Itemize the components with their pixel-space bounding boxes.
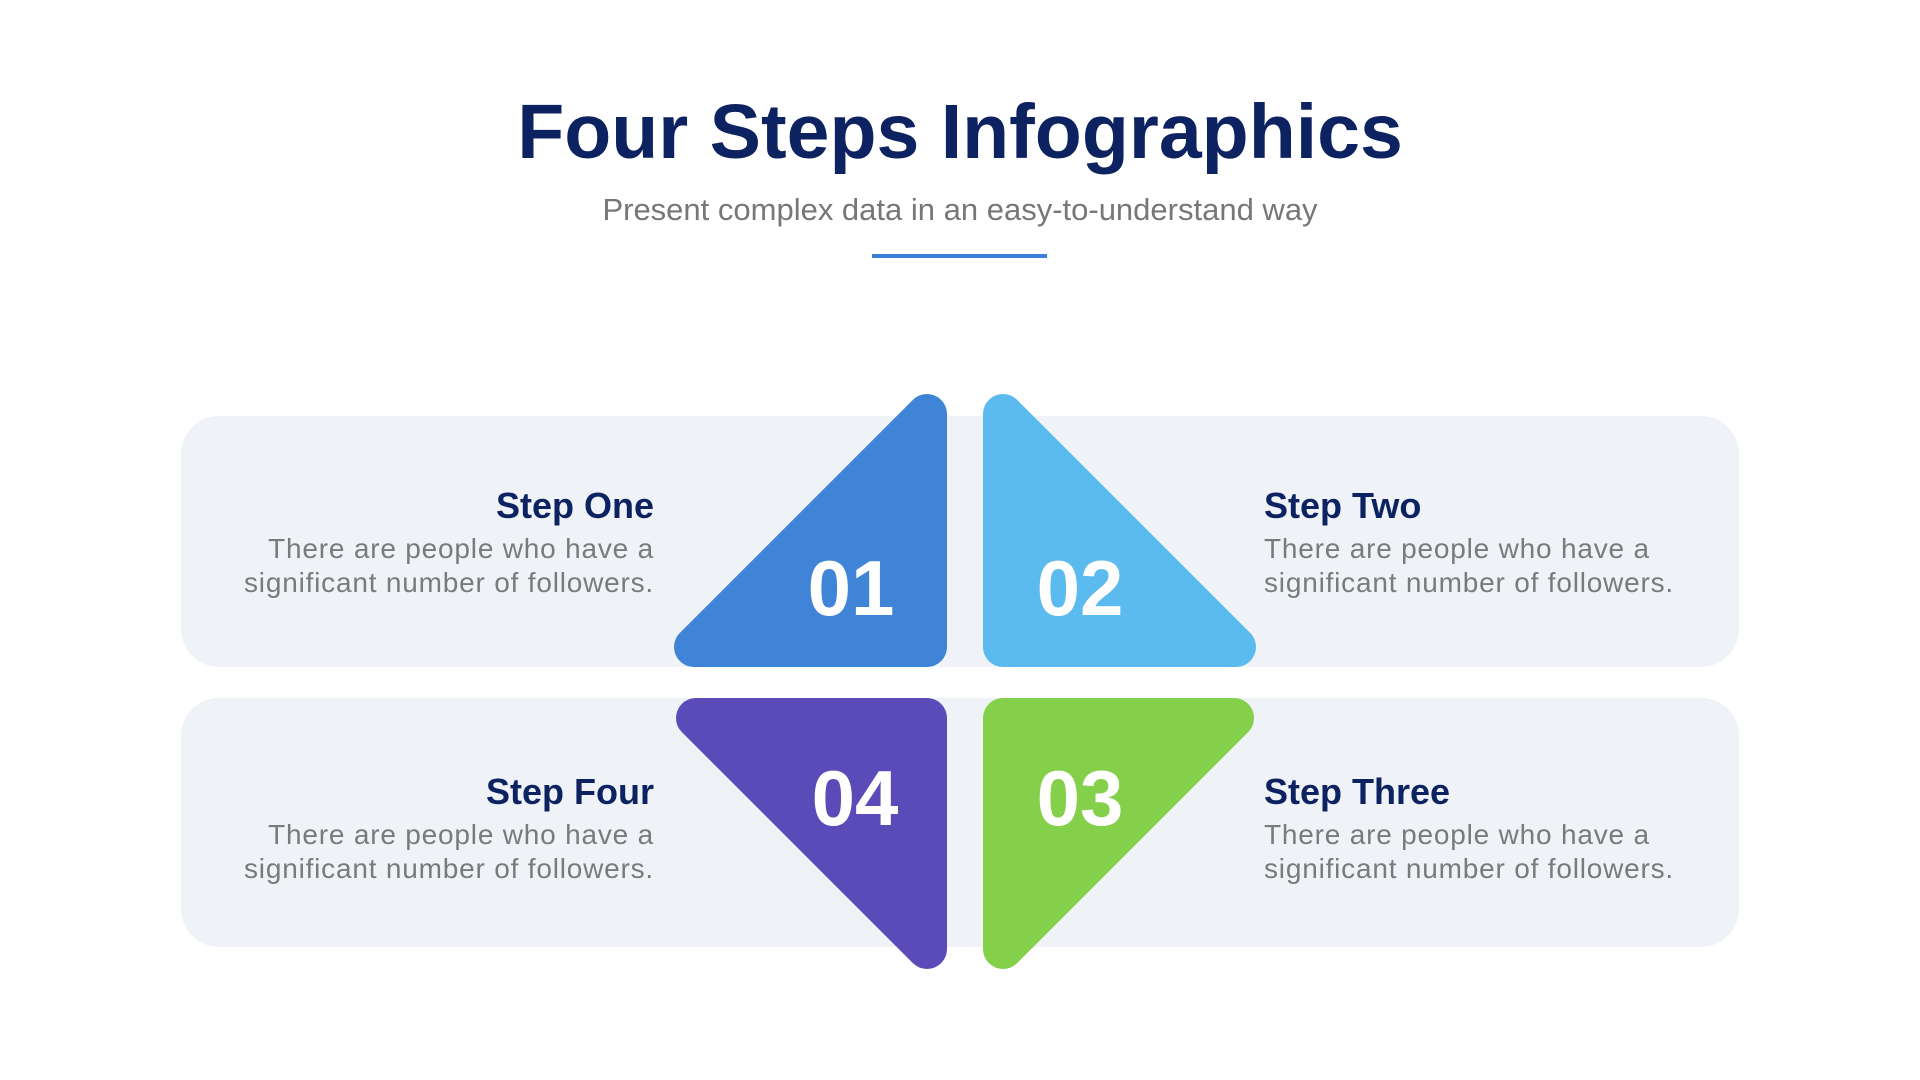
text: step one: Step One <box>496 485 654 526</box>
text: step four: Step Four <box>486 771 654 812</box>
triangle 03 <box>1003 718 1234 949</box>
triangle 04 <box>696 718 927 949</box>
subtitle: Present complex data in an easy-to-understand way <box>602 192 1318 227</box>
text: step two <box>1264 485 1674 598</box>
text: step one <box>244 485 654 598</box>
triangle 02: 02 <box>1037 544 1123 632</box>
text: step two: significant number of followers. <box>1264 567 1674 598</box>
text: step four: significant number of followers. <box>244 853 654 884</box>
text: step four <box>244 771 654 884</box>
panel: bottom row <box>181 698 1739 947</box>
text: step one: There are people who have a <box>268 533 654 564</box>
text: step four: There are people who have a <box>268 819 654 850</box>
triangle 03: 03 <box>1037 754 1123 842</box>
triangle 02 <box>1003 414 1236 647</box>
text: step one: significant number of followers. <box>244 567 654 598</box>
title underline <box>872 254 1047 258</box>
triangle 01: 01 <box>808 544 894 632</box>
title: Four Steps Infographics <box>517 89 1403 175</box>
triangle 04: 04 <box>812 754 898 842</box>
text: step three <box>1264 771 1674 884</box>
text: step three: significant number of followers. <box>1264 853 1674 884</box>
text: step three: There are people who have a <box>1264 819 1650 850</box>
text: step two: Step Two <box>1264 485 1421 526</box>
panel: top row <box>181 416 1739 667</box>
triangle 01 <box>694 414 927 647</box>
text: step two: There are people who have a <box>1264 533 1650 564</box>
text: step three: Step Three <box>1264 771 1450 812</box>
